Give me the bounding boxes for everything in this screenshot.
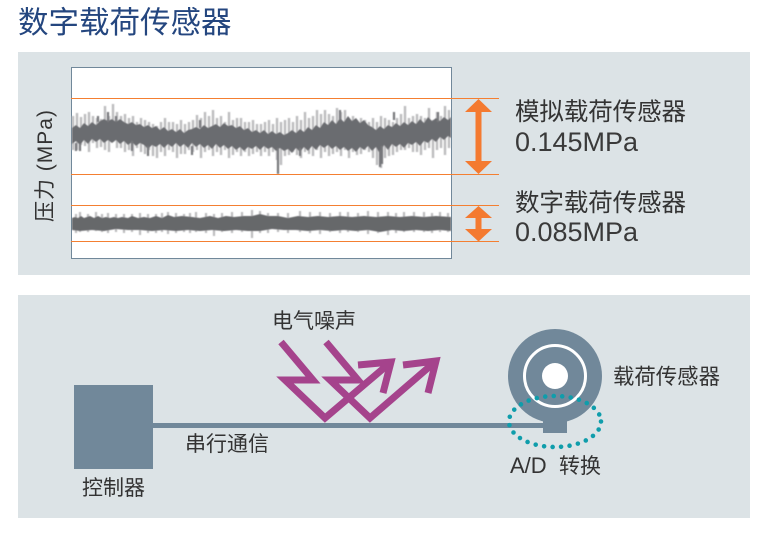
A/D conversion label: 转换 (559, 455, 601, 478)
panel: pressure chart (18, 52, 750, 275)
digital sensor noise trace (72, 210, 451, 238)
icon: noise arrow 1 (281, 342, 391, 418)
icon: load sensor (508, 329, 602, 433)
panel: system diagram (18, 295, 750, 518)
controller box (74, 385, 153, 469)
title: 数字载荷传感器 (18, 6, 232, 40)
arrow: digital range (465, 206, 492, 242)
serial communication label: 串行通信 (185, 433, 269, 456)
A/D dotted highlight (509, 396, 601, 447)
controller label: 控制器 (82, 477, 145, 500)
arrow: analog range (465, 99, 492, 174)
electrical noise label: 电气噪声 (272, 310, 356, 333)
digital value: 0.085MPa (515, 217, 639, 247)
analog sensor noise trace (72, 104, 451, 174)
orange threshold lines (71, 98, 499, 242)
icon: noise arrow 2 (326, 342, 436, 418)
A/D conversion label: A/D (510, 453, 547, 478)
serial line (153, 423, 545, 428)
analog value: 0.145MPa (515, 127, 639, 157)
digital sensor label: 数字载荷传感器 (515, 189, 686, 217)
load sensor label: 载荷传感器 (613, 365, 720, 389)
analog sensor label: 模拟载荷传感器 (515, 98, 686, 126)
chart frame (72, 68, 452, 258)
y axis label: 压力 (MPa) (34, 110, 57, 222)
